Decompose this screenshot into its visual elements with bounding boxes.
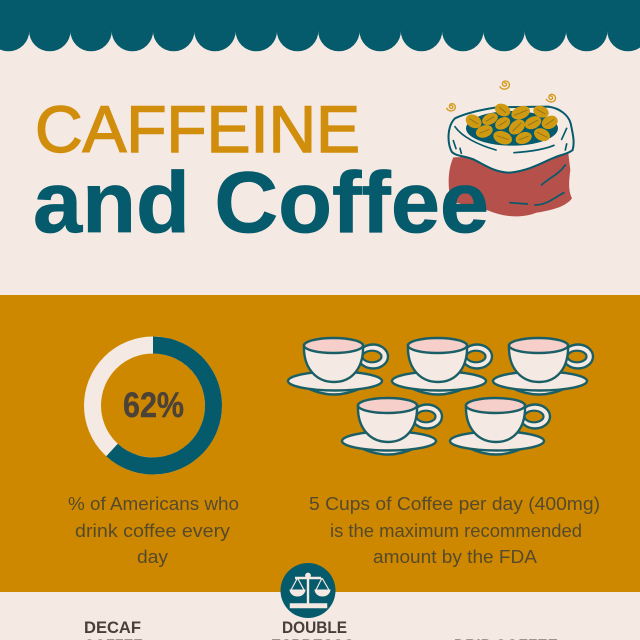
heading: Double Espresso: DOUBLE — [282, 618, 347, 637]
top scalloped banner — [0, 0, 640, 51]
title: and Coffee: and Coffee — [33, 155, 489, 251]
panel: statistics band — [0, 295, 640, 592]
icon: coffee bean sack — [445, 81, 574, 216]
heading: Decaf Coffee: DECAF — [84, 618, 141, 637]
text: Americans statistic: drink coffee every — [75, 521, 230, 541]
text: FDA recommendation — [309, 494, 600, 567]
donut chart: 62% — [92, 345, 214, 466]
text: Americans statistic: day — [137, 547, 168, 567]
icon: scales badge — [280, 563, 336, 618]
title: CAFFEINE: CAFFEINE — [35, 92, 360, 166]
donut value: 62% — [123, 386, 184, 425]
text: Americans statistic: % of Americans who — [68, 494, 239, 514]
text: Americans statistic — [68, 494, 239, 567]
text: FDA recommendation: 5 Cups of Coffee per day (400mg) — [309, 494, 600, 514]
icon: five coffee cups — [288, 338, 593, 454]
text: FDA recommendation: amount by the FDA — [373, 547, 537, 567]
text: FDA recommendation: is the maximum recommended — [330, 521, 582, 541]
